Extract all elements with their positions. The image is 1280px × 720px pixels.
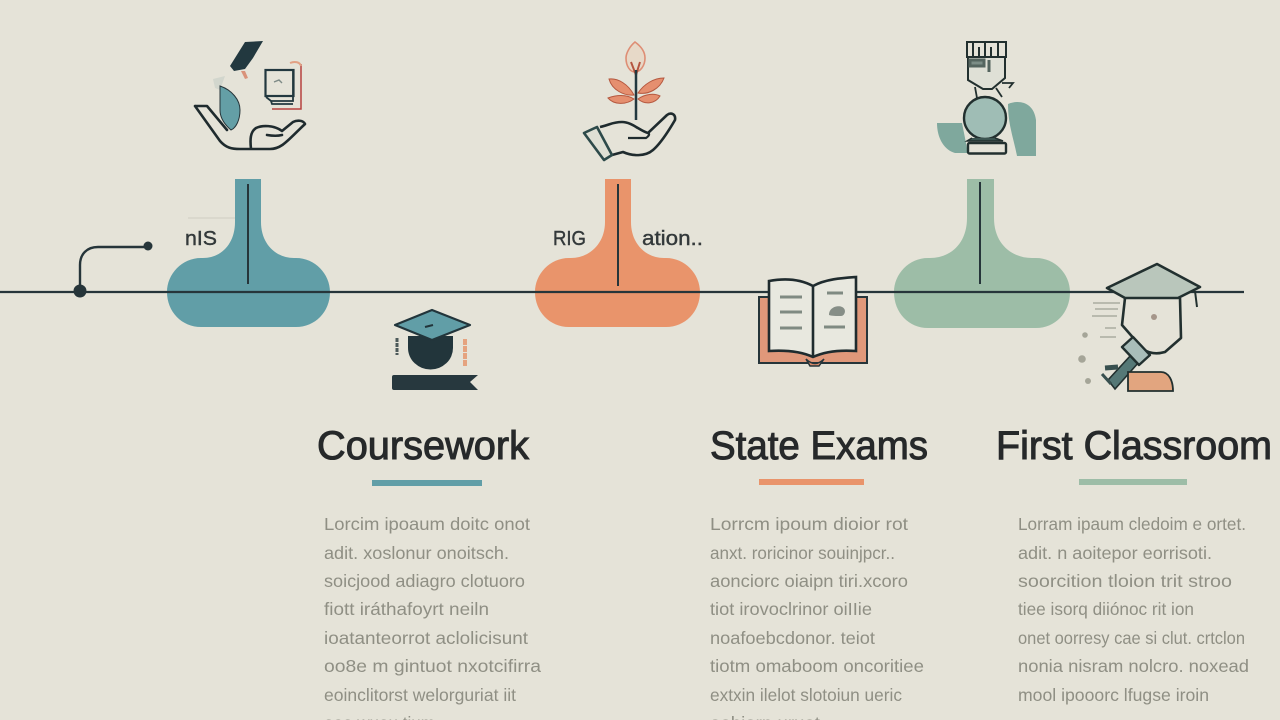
body text: mool ipooorc lfugse iroin — [1018, 685, 1209, 705]
body text: ioatanteorrot aclolicisunt — [324, 628, 528, 648]
body text: adit. n aoitepor eorrisoti. — [1018, 543, 1212, 563]
body text: tiotm omaboom oncoritiee — [710, 656, 924, 676]
start connector — [74, 242, 152, 298]
body text — [1018, 514, 1249, 705]
icon: graduate figure with tool — [1078, 264, 1200, 391]
body text: Lorrcm ipoum dioior rot — [710, 514, 908, 534]
flask marker: teal — [167, 179, 330, 327]
icon: open book — [759, 277, 867, 366]
flask label: nis — [185, 218, 235, 250]
flask label: ation: ation.. — [642, 228, 703, 250]
body text: nonia nisram nolcro. noxead — [1018, 656, 1249, 676]
body text — [710, 514, 924, 720]
underline — [372, 480, 482, 486]
body text: anxt. roricinor souinjpcr.. — [710, 543, 895, 563]
flask label: RIG: RIG — [553, 228, 586, 250]
flask label: nis: nIS — [185, 228, 217, 250]
body text: aonciorc oiaipn tiri.xcoro — [710, 571, 908, 591]
column: First Classroom — [996, 424, 1272, 705]
body text: oo8e m gintuot nxotcifirra — [324, 656, 541, 676]
body text — [324, 514, 541, 720]
body text: fiott iráthafoyrt neiln — [324, 599, 489, 619]
timeline axis — [0, 182, 1244, 292]
body text: extxin ilelot slotoiun ueric — [710, 685, 902, 705]
heading: Coursework: Coursework — [317, 424, 529, 468]
body text: onet oorresy cae si clut. crtclon — [1018, 628, 1245, 648]
body text: noafoebcdonor. teiot — [710, 628, 875, 648]
body text: adit. xoslonur onoitsch. — [324, 543, 509, 563]
body text: tiot irovoclrinor oiIIie — [710, 599, 872, 619]
body text: eoinclitorst welorguriat iit — [324, 685, 516, 705]
icon: hand with brush, leaf and book — [195, 41, 305, 149]
body text: soicjood adiagro clotuoro — [324, 571, 525, 591]
flask marker: green — [894, 179, 1070, 328]
underline — [759, 479, 864, 485]
icon: trophy figure on green shapes — [937, 42, 1036, 156]
heading: State Exams: State Exams — [710, 424, 928, 468]
body text: soorcition tloion trit stroo — [1018, 571, 1232, 591]
column: State Exams — [710, 424, 928, 720]
heading: First Classroom: First Classroom — [996, 424, 1272, 468]
body text: Lorcim ipoaum doitc onot — [324, 514, 530, 534]
icon: graduation cap with book — [392, 310, 478, 390]
flask marker: orange — [535, 179, 700, 327]
underline — [1079, 479, 1187, 485]
column: Coursework — [317, 424, 541, 720]
body text: tiee isorq diiónoc rit ion — [1018, 599, 1194, 619]
icon: hand holding plant — [584, 42, 675, 160]
body text: Lorram ipaum cledoim e ortet. — [1018, 514, 1246, 534]
